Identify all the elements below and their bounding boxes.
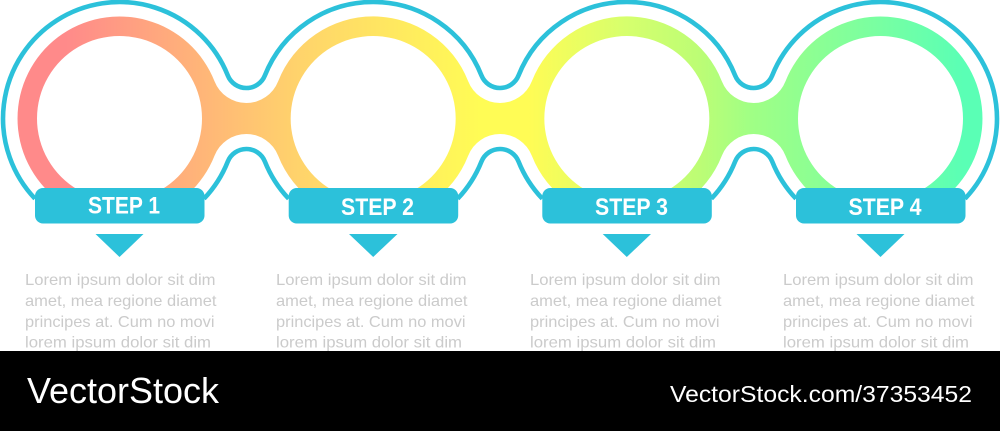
footer url: VectorStock.com/37353452 <box>670 381 972 407</box>
text block 3: lorem ipsum dolor sit dim <box>530 334 716 352</box>
footer logo: VectorStock <box>27 370 220 411</box>
text block 3: principes at. Cum no movi <box>530 314 720 331</box>
text block 1: principes at. Cum no movi <box>25 314 214 331</box>
text block 4: principes at. Cum no movi <box>783 314 972 331</box>
step 4 label: STEP 4 <box>848 194 922 221</box>
arrow 3 <box>603 234 651 257</box>
text block 3: Lorem ipsum dolor sit dim <box>530 272 720 289</box>
step 2 label <box>289 188 458 224</box>
outline: top contour <box>3 2 997 199</box>
text block 1 <box>25 272 217 352</box>
step 3 label: STEP 3 <box>595 194 668 221</box>
outline: lower connectors <box>204 149 796 199</box>
text block 2 <box>276 272 468 352</box>
step 1 label: STEP 1 <box>88 192 160 220</box>
footer bar <box>0 351 1000 431</box>
text block 2: Lorem ipsum dolor sit dim <box>276 272 466 289</box>
step 3 label <box>542 188 712 224</box>
step 1 label <box>35 188 204 224</box>
arrow 4 <box>856 234 904 257</box>
step 2 label: STEP 2 <box>341 194 414 221</box>
arrow 2 <box>349 234 398 257</box>
text block 1: amet, mea regione diamet <box>25 293 217 310</box>
text block 2: principes at. Cum no movi <box>276 314 466 331</box>
text block 1: lorem ipsum dolor sit dim <box>25 334 211 352</box>
text block 1: Lorem ipsum dolor sit dim <box>25 272 216 289</box>
step 4 label <box>796 188 966 224</box>
text block 2: lorem ipsum dolor sit dim <box>276 334 462 352</box>
text block 4: Lorem ipsum dolor sit dim <box>783 272 974 289</box>
arrow 1 <box>96 234 144 257</box>
text block 2: amet, mea regione diamet <box>276 293 468 310</box>
text block 4: lorem ipsum dolor sit dim <box>783 334 969 352</box>
text block 4 <box>783 272 975 352</box>
text block 3: amet, mea regione diamet <box>530 293 722 310</box>
gradient chain of four rings <box>18 16 982 221</box>
text block 4: amet, mea regione diamet <box>783 293 975 310</box>
text block 3 <box>530 272 722 352</box>
